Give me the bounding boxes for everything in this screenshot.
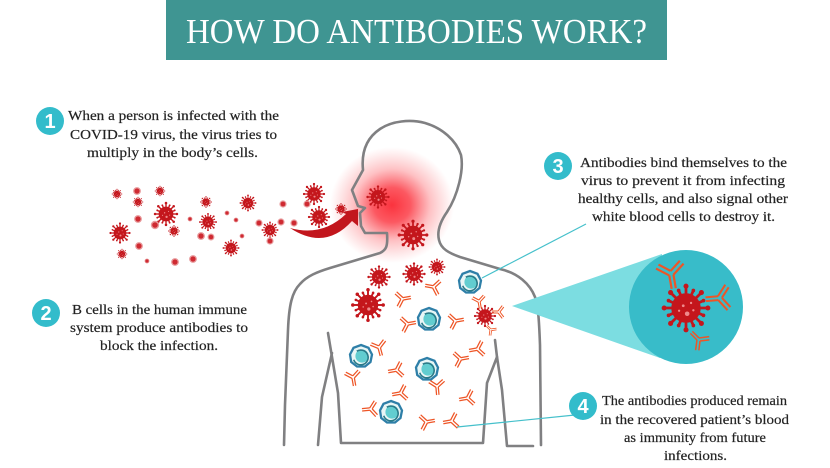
human body outline bbox=[284, 121, 541, 446]
magnified antibody bottom bbox=[685, 326, 711, 352]
leader line: step 4 bbox=[457, 415, 575, 427]
title bbox=[166, 0, 667, 60]
badge 2 bbox=[32, 299, 60, 327]
cone bbox=[512, 254, 662, 358]
text 1: multiply in the body’s cells. bbox=[87, 146, 258, 161]
text 2: B cells in the human immune bbox=[72, 303, 247, 318]
text 3: virus to prevent it from infecting bbox=[581, 174, 785, 189]
step 4: 4 bbox=[577, 396, 589, 418]
step 2 bbox=[32, 299, 248, 354]
text 1: When a person is infected with the bbox=[68, 109, 279, 124]
text 4: in the recovered patient’s blood bbox=[600, 413, 789, 428]
magnified antibody top bbox=[655, 260, 688, 291]
step 3 bbox=[544, 152, 788, 225]
antibodies bbox=[344, 278, 504, 431]
title: HOW DO ANTIBODIES WORK? bbox=[186, 12, 647, 51]
step 3: 3 bbox=[552, 156, 564, 178]
magnified view bbox=[512, 250, 743, 364]
magnified antibody right bbox=[705, 284, 731, 312]
text 3: healthy cells, and also signal other bbox=[578, 192, 788, 207]
text 2 bbox=[70, 303, 248, 354]
lens circle bbox=[629, 250, 743, 364]
step 1: 1 bbox=[44, 111, 56, 133]
badge 1 bbox=[36, 107, 64, 135]
text 1: COVID-19 virus, the virus tries to bbox=[70, 128, 277, 143]
red infection glow bbox=[330, 147, 454, 263]
virus particles exhaled bbox=[109, 183, 347, 266]
text 4: as immunity from future bbox=[624, 431, 766, 446]
magnified virus bbox=[662, 284, 710, 332]
text 3: white blood cells to destroy it. bbox=[592, 210, 775, 225]
viruses in head and chest bbox=[351, 185, 496, 327]
step 4 bbox=[569, 392, 789, 464]
B cells bbox=[350, 271, 481, 422]
text 4: infections. bbox=[664, 449, 727, 464]
text 4: The antibodies produced remain bbox=[602, 394, 787, 409]
arrow: into mouth bbox=[290, 209, 358, 238]
leader line: step 3 bbox=[482, 224, 586, 278]
text 2: system produce antibodies to bbox=[70, 321, 248, 336]
step 1 bbox=[36, 107, 279, 161]
text 2: block the infection. bbox=[100, 339, 218, 354]
text 3: Antibodies bind themselves to the bbox=[580, 156, 787, 171]
badge 4 bbox=[569, 392, 597, 420]
badge 3 bbox=[544, 152, 572, 180]
text 1 bbox=[68, 109, 279, 161]
text 3 bbox=[578, 156, 788, 225]
step 2: 2 bbox=[40, 303, 52, 325]
text 4 bbox=[600, 394, 789, 464]
